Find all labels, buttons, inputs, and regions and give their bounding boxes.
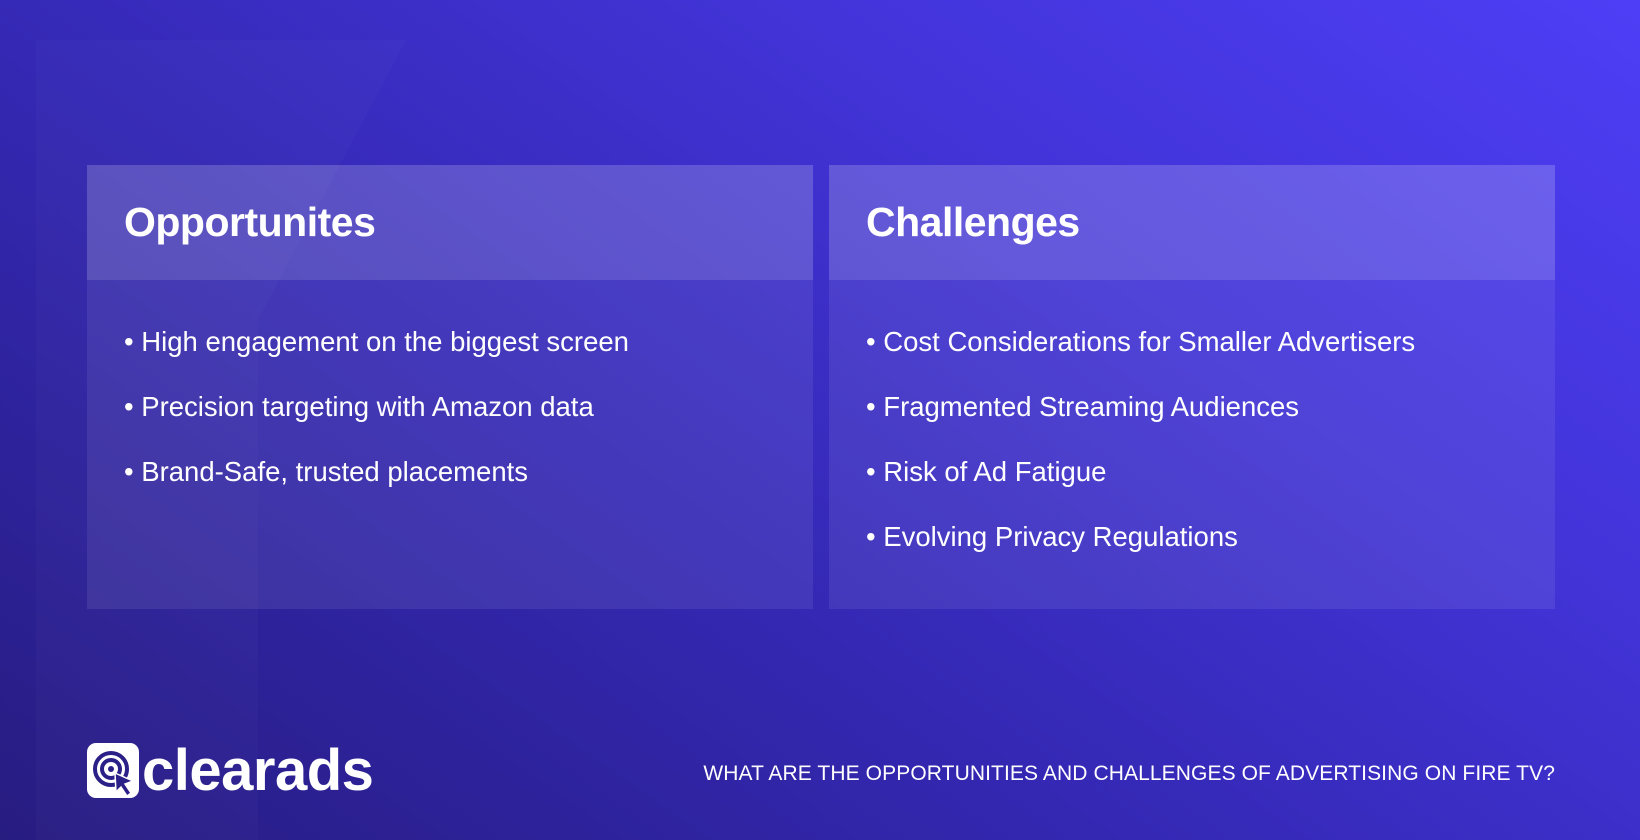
heading: challenges: [829, 165, 1555, 280]
list: opportunities: • Precision targeting with Amazon data: [124, 391, 594, 422]
heading: challenges: Challenges: [866, 199, 1080, 245]
panel: challenges: [829, 165, 1555, 609]
list: challenges: • Cost Considerations for Smaller Advertisers: [866, 326, 1415, 357]
heading: opportunities: [87, 165, 813, 280]
list: challenges: [866, 326, 1415, 552]
heading: opportunities: Opportunites: [124, 199, 375, 245]
list: opportunities: • High engagement on the biggest screen: [124, 326, 629, 357]
logo: clearads: clearads: [142, 738, 373, 803]
list: challenges: • Risk of Ad Fatigue: [866, 456, 1106, 487]
list: challenges: • Fragmented Streaming Audiences: [866, 391, 1299, 422]
list: opportunities: [124, 326, 629, 487]
footer caption: WHAT ARE THE OPPORTUNITIES AND CHALLENGES OF ADVERTISING ON FIRE TV?: [703, 762, 1555, 785]
panel: opportunities: [87, 165, 813, 609]
list: opportunities: • Brand-Safe, trusted placements: [124, 456, 528, 487]
list: challenges: • Evolving Privacy Regulations: [866, 521, 1238, 552]
icon: target cursor: [87, 743, 139, 798]
